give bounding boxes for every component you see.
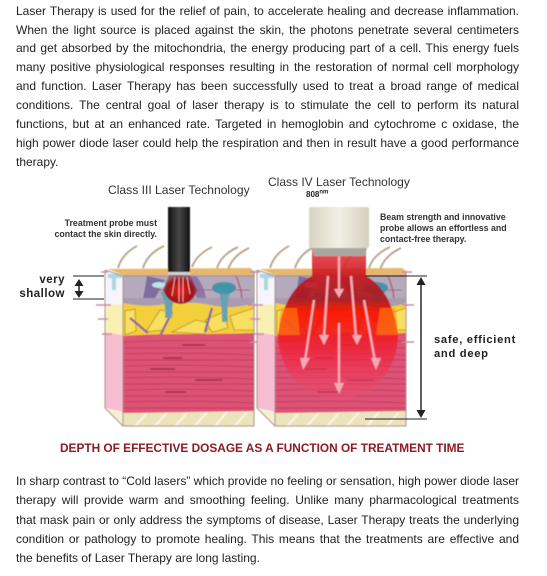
paragraph: introduction: and get absorbed by the mitochondria, the energy producing part of a cell. This energy fuels — [16, 41, 519, 55]
paragraph: conclusion: therapy will provide warm and smoothing feeling. Unlike many pharmacological treatments — [16, 493, 519, 507]
class III probe and beam — [163, 207, 197, 304]
paragraph: conclusion: that mask pain or only address the symptoms of disease, Laser Therapy treats the underlying — [16, 513, 519, 527]
illustration: class IV skin block — [248, 246, 414, 426]
paragraph: conclusion: condition or pathology to promote healing. This means that the treatments are effective and — [16, 532, 519, 546]
label: 808nm: 808nm — [306, 189, 328, 199]
label: safe, efficient and deep: and deep — [434, 348, 489, 360]
paragraph: introduction: high power diode laser could help the respiration and then in result have a good performance — [16, 136, 519, 150]
paragraph: introduction: therapy. — [16, 155, 58, 169]
note: class III probe — [54, 218, 157, 239]
note: class III probe: contact the skin directly. — [54, 229, 157, 239]
paragraph: introduction: functions, but at an enhanced rate. Targeted in hemoglobin and cytochrome c oxidase, the — [16, 117, 519, 131]
paragraph: introduction: conditions. The central goal of laser therapy is to stimulate the cell to perform its natural — [16, 98, 519, 112]
paragraph: introduction: many positive physiological responses resulting in the restoration of normal cell morphology — [16, 60, 519, 74]
illustration: class III skin block — [96, 246, 262, 426]
paragraph: introduction: When the light source is placed against the skin, the photons penetrate several centimeters — [16, 23, 519, 37]
label: safe, efficient and deep: safe, efficient — [434, 334, 516, 346]
class IV probe and beam — [278, 207, 398, 399]
label: very shallow: shallow — [19, 288, 65, 300]
note: class IV probe: Beam strength and innovative — [380, 212, 506, 222]
paragraph: conclusion: the benefits of Laser Therapy are long lasting. — [16, 551, 260, 565]
label: very shallow: very — [39, 274, 65, 286]
label: very shallow — [19, 274, 65, 300]
dimension: very shallow — [73, 276, 104, 299]
heading: class III: Class III Laser Technology — [108, 183, 250, 197]
paragraph: introduction — [16, 4, 519, 169]
paragraph: conclusion — [16, 474, 519, 565]
arrows in beam — [300, 256, 381, 394]
paragraph: conclusion: In sharp contrast to “Cold lasers” which provide no feeling or sensation, high power diode laser — [16, 474, 519, 488]
label: safe, efficient and deep — [434, 334, 516, 360]
paragraph: introduction: and function. Laser Therapy has been successfully used to treat a broad range of medical — [16, 79, 519, 93]
caption: depth of effective dosage: DEPTH OF EFFECTIVE DOSAGE AS A FUNCTION OF TREATMENT TIME — [60, 441, 464, 455]
dimension: safe, efficient and deep — [365, 276, 427, 419]
note: class IV probe: contact-free therapy. — [380, 234, 466, 244]
paragraph: introduction: Laser Therapy is used for the relief of pain, to accelerate healing and decrease inflammation. — [16, 4, 519, 18]
heading: class IV: Class IV Laser Technology — [268, 175, 410, 189]
note: class IV probe: probe allows an effortless and — [380, 223, 507, 233]
note: class IV probe — [380, 212, 507, 244]
note: class III probe: Treatment probe must — [65, 218, 157, 228]
